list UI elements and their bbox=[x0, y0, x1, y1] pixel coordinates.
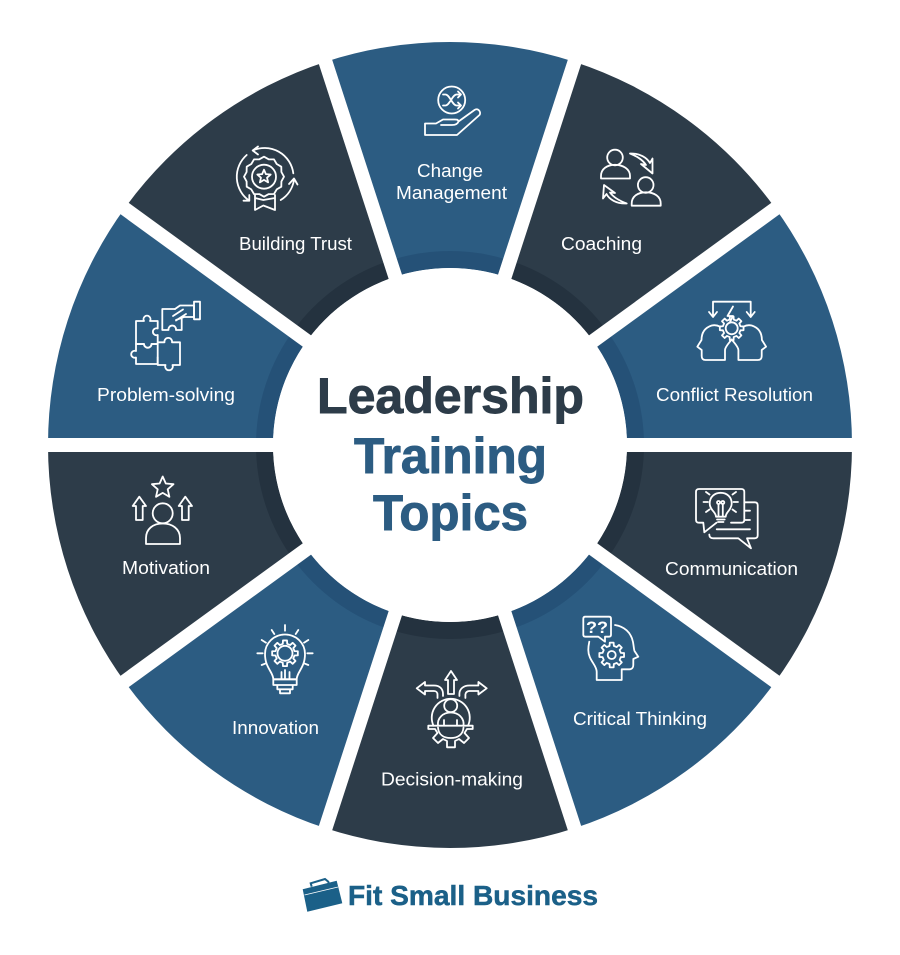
label: Critical Thinking: Critical Thinking bbox=[573, 709, 707, 729]
panel: Critical Thinking bbox=[505, 549, 775, 828]
icon: person with star and up arrows bbox=[133, 476, 192, 544]
label: Motivation: Motivation bbox=[122, 558, 210, 578]
title: Topics bbox=[373, 485, 528, 541]
icon: briefcase bbox=[303, 879, 342, 912]
title bbox=[317, 368, 584, 541]
panel: Coaching bbox=[505, 62, 775, 341]
label: Innovation: Innovation bbox=[232, 718, 319, 738]
panel: Motivation bbox=[48, 445, 307, 682]
label: Conflict Resolution: Conflict Resolution bbox=[656, 385, 813, 405]
panel: Change Management bbox=[326, 42, 574, 277]
logo: Fit Small Business bbox=[303, 879, 598, 912]
panel: Conflict Resolution bbox=[593, 208, 852, 445]
label: Communication: Communication bbox=[665, 559, 798, 579]
label: Decision-making: Decision-making bbox=[381, 770, 523, 790]
panel: Problem-solving bbox=[48, 208, 307, 445]
title: Leadership bbox=[317, 368, 584, 424]
label: Coaching: Coaching bbox=[561, 234, 642, 254]
wordmark: Fit Small Business bbox=[348, 880, 598, 911]
icon: two heads with gear and bolt bbox=[697, 302, 766, 360]
label: Change Management bbox=[396, 161, 507, 203]
icon text: question marks: ?? bbox=[586, 618, 608, 637]
panel: Decision-making bbox=[326, 613, 574, 848]
icon: hand holding shuffle arrows bbox=[425, 86, 480, 135]
label: Building Trust: Building Trust bbox=[239, 234, 352, 254]
label: Change Management: Management bbox=[396, 183, 507, 203]
panel: Building Trust bbox=[125, 62, 395, 341]
icon: lightbulb with gear bbox=[257, 625, 313, 693]
icon: person in gear with three arrows bbox=[417, 671, 487, 747]
icon: speech bubbles with lightbulb bbox=[696, 489, 758, 548]
icon: two people with cycle arrows bbox=[601, 150, 661, 206]
icon: rosette with star and circular arrows bbox=[237, 146, 298, 210]
label: Change Management: Change bbox=[417, 161, 483, 181]
icon: head with gear and question marks bbox=[583, 617, 638, 680]
center circle bbox=[273, 268, 627, 622]
panel: Communication bbox=[593, 445, 852, 682]
title: Training bbox=[354, 428, 547, 484]
label: Problem-solving: Problem-solving bbox=[97, 385, 235, 405]
icon: puzzle pieces and hand bbox=[131, 302, 200, 370]
panel: Innovation bbox=[125, 549, 395, 828]
